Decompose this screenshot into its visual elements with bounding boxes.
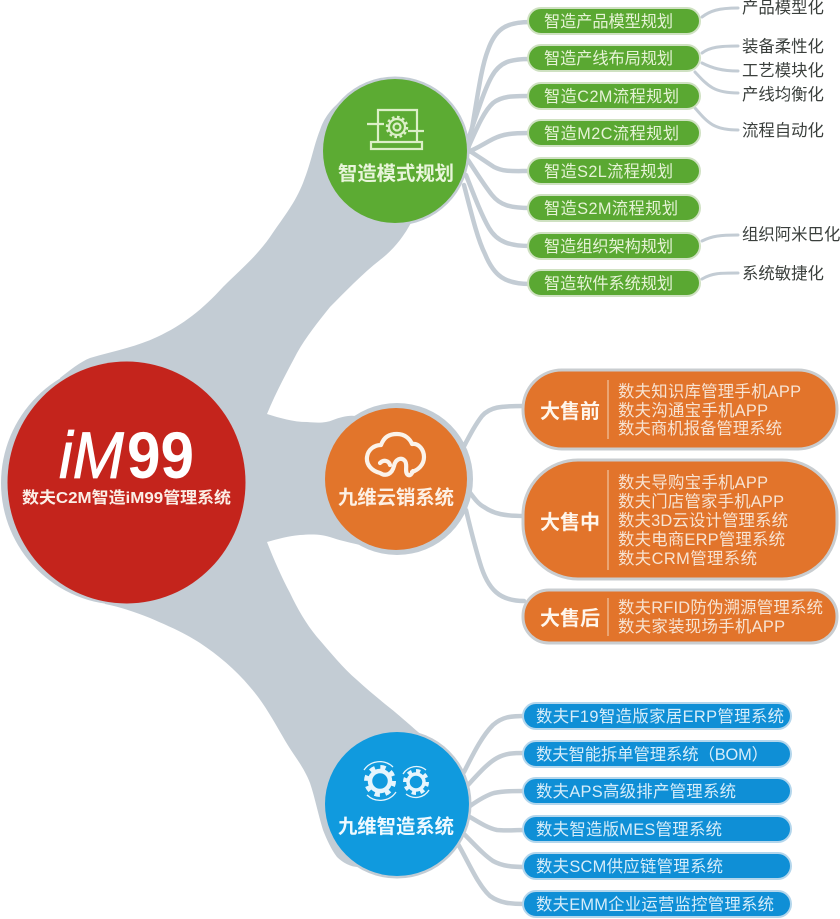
pill: APS <box>523 778 791 804</box>
pill: EMM <box>523 891 791 917</box>
green sub-items <box>742 0 840 283</box>
pill: F19: 数夫F19智造版家居ERP管理系统 <box>536 708 784 726</box>
pill: 智造S2M流程规划: 智造S2M流程规划 <box>544 200 678 218</box>
panel: 大售前: 数夫知识库管理手机APP <box>618 383 801 401</box>
node: 智造模式规划 <box>320 76 470 226</box>
pill: 智造S2L流程规划 <box>528 158 700 184</box>
pill: 智造M2C流程规划: 智造M2C流程规划 <box>544 125 679 143</box>
pill: APS: 数夫APS高级排产管理系统 <box>536 783 736 801</box>
panel: 大售后: 数夫RFID防伪溯源管理系统 <box>618 599 823 617</box>
pill: 智造产品模型规划: 智造产品模型规划 <box>544 13 673 31</box>
pill: 智造C2M流程规划 <box>528 83 700 109</box>
central red circle <box>8 362 246 604</box>
panel: 大售中: 数夫3D云设计管理系统 <box>618 512 788 530</box>
pill: EMM: 数夫EMM企业运营监控管理系统 <box>536 896 774 914</box>
green pills <box>528 8 700 296</box>
node: 九维云销系统 <box>321 403 473 555</box>
sub-item: 产线均衡化 <box>742 86 824 104</box>
label: 九维云销系统 <box>338 486 454 509</box>
panel: 大售后: 数夫家装现场手机APP <box>618 618 785 636</box>
pill: F19 <box>523 703 791 729</box>
icon: laptop with gear <box>367 110 424 149</box>
node: 九维智造系统 <box>322 730 472 878</box>
panel: 大售中: 数夫门店管家手机APP <box>618 493 784 511</box>
blue branch connectors <box>458 716 525 904</box>
sub-item: 流程自动化 <box>742 122 824 140</box>
sub-item: 系统敏捷化 <box>742 265 824 283</box>
pill: 智造软件系统规划 <box>528 270 700 296</box>
icon: gears <box>364 762 429 800</box>
pill: 智造S2M流程规划 <box>528 195 700 221</box>
logo digits: 99 <box>127 418 194 492</box>
pill: 智造产线布局规划: 智造产线布局规划 <box>544 50 673 68</box>
icon: cloud <box>367 434 424 475</box>
panel: 大售中: 大售中 <box>540 511 600 534</box>
panel: 大售后: 大售后 <box>540 607 600 630</box>
green branch connectors <box>464 22 530 284</box>
panel: 大售前: 数夫沟通宝手机APP <box>618 402 768 420</box>
pill: 智造软件系统规划: 智造软件系统规划 <box>544 275 673 293</box>
pill: BOM <box>523 741 791 767</box>
orange branch connectors <box>462 406 524 601</box>
panel: 大售前: 大售前 <box>540 400 600 423</box>
pill: BOM: 数夫智能拆单管理系统（BOM） <box>536 746 768 764</box>
pill: 智造M2C流程规划 <box>528 120 700 146</box>
label: 九维智造系统 <box>338 815 454 838</box>
panel: 大售中: 数夫CRM管理系统 <box>618 550 757 568</box>
pill: SCM: 数夫SCM供应链管理系统 <box>536 857 723 876</box>
panel: 大售中: 数夫导购宝手机APP <box>618 474 768 492</box>
sub-item: 组织阿米巴化 <box>742 226 840 244</box>
panel: 大售中: 数夫电商ERP管理系统 <box>618 531 785 549</box>
main grey connectors <box>1 96 425 867</box>
sub-item: 工艺模块化 <box>742 62 824 80</box>
pill: MES <box>523 816 791 842</box>
blue pills <box>523 703 791 917</box>
pill: 智造S2L流程规划: 智造S2L流程规划 <box>544 163 673 181</box>
pill: 智造C2M流程规划: 智造C2M流程规划 <box>544 88 679 106</box>
central title: 数夫C2M智造iM99管理系统 <box>22 488 231 507</box>
panel: 大售中 <box>523 460 837 579</box>
label: 智造模式规划 <box>338 163 454 185</box>
pill: MES: 数夫智造版MES管理系统 <box>536 821 722 839</box>
panel: 大售后 <box>523 590 837 643</box>
panel: 大售前 <box>523 370 837 449</box>
pill: 智造产线布局规划 <box>528 45 700 71</box>
pill: 智造组织架构规划 <box>528 233 700 259</box>
pill: SCM <box>523 853 791 879</box>
sub-item: 装备柔性化 <box>742 38 824 56</box>
orange panels <box>523 370 837 643</box>
logo: iM99: iM <box>59 418 124 492</box>
pill: 智造产品模型规划 <box>528 8 700 34</box>
panel: 大售前: 数夫商机报备管理系统 <box>618 420 782 438</box>
sub-item connectors <box>695 8 738 279</box>
pill: 智造组织架构规划: 智造组织架构规划 <box>544 238 673 256</box>
